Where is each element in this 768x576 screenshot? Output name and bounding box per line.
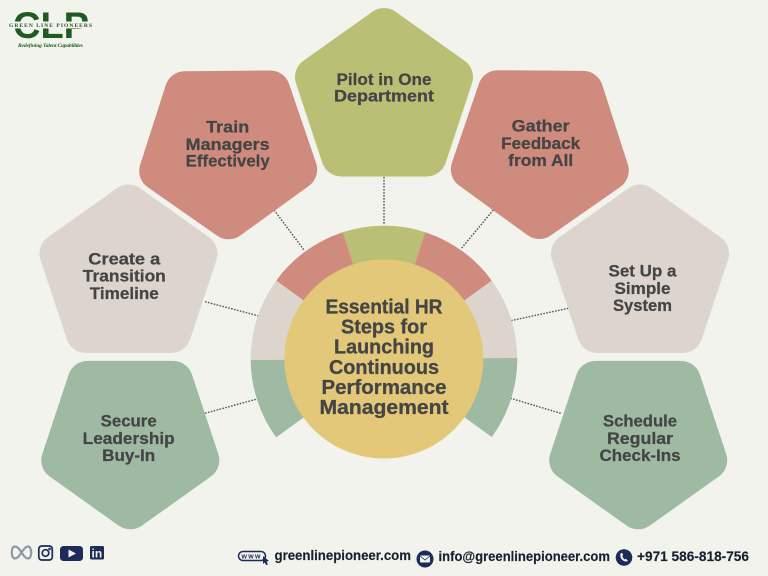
panel: Secure Leadership Buy-In: Secure — [101, 413, 157, 431]
icon: instagram — [39, 546, 52, 560]
panel: Train Managers Effectively: Train — [206, 119, 249, 137]
footer contacts — [238, 547, 749, 568]
center circle with title: Performance — [322, 376, 446, 399]
logo: Green Line Pioneers: Redefining Talent Capabilities — [17, 43, 83, 49]
panel: Schedule Regular Check-Ins: Schedule — [603, 413, 677, 431]
icon: www cursor: www — [240, 554, 261, 560]
panel: Set Up a Simple System — [571, 204, 709, 333]
panel: Gather Feedback from All: from All — [508, 152, 573, 170]
phone text: +971 586-818-756 — [637, 548, 749, 564]
panel: Secure Leadership Buy-In: Buy-In — [102, 447, 155, 465]
panel: Secure Leadership Buy-In — [61, 381, 199, 509]
center circle with title: Continuous — [329, 356, 439, 379]
panel: Create a Transition Timeline: Timeline — [90, 285, 159, 303]
panel: Schedule Regular Check-Ins: Check-Ins — [600, 447, 680, 465]
logo: Green Line Pioneers: GREEN LINE PIONEERS — [9, 23, 92, 29]
icon: youtube — [60, 546, 83, 561]
panel: Pilot in One Department — [315, 28, 453, 156]
icon: phone — [616, 549, 632, 566]
panel: Train Managers Effectively — [159, 90, 298, 220]
panel: Gather Feedback from All — [470, 90, 609, 220]
panel: Schedule Regular Check-Ins — [569, 381, 707, 509]
icon: linkedin: in — [92, 546, 102, 560]
logo: Green Line Pioneers: CLP — [13, 5, 89, 46]
center circle with title: Management — [320, 396, 449, 419]
panel: Schedule Regular Check-Ins: Regular — [607, 430, 674, 448]
icon: email — [416, 550, 434, 568]
email text: info@greenlinepioneer.com — [438, 548, 610, 564]
panel: Set Up a Simple System: Set Up a — [608, 263, 677, 281]
social icons — [12, 546, 104, 561]
website text: greenlinepioneer.com — [274, 547, 411, 563]
panel: Create a Transition Timeline: Create a — [88, 250, 161, 268]
panel: Set Up a Simple System: Simple — [614, 280, 670, 298]
panel: Set Up a Simple System: System — [613, 297, 672, 315]
center circle with title: Steps for — [341, 315, 427, 338]
center circle with title: Launching — [334, 335, 434, 358]
center circle with title — [284, 260, 483, 458]
panel: Train Managers Effectively: Effectively — [186, 153, 271, 171]
panel: Pilot in One Department: Department — [334, 88, 435, 106]
panel: Secure Leadership Buy-In: Leadership — [83, 430, 175, 448]
center circle with title: Essential HR — [326, 295, 443, 318]
panel: Pilot in One Department: Pilot in One — [336, 71, 432, 89]
panel: Train Managers Effectively: Managers — [186, 136, 270, 154]
panel: Create a Transition Timeline: Transition — [83, 268, 166, 286]
panel: Create a Transition Timeline — [60, 204, 198, 333]
panel: Gather Feedback from All: Feedback — [501, 135, 581, 153]
panel: Gather Feedback from All: Gather — [512, 118, 570, 136]
segmented ring — [251, 226, 517, 437]
icon: meta — [12, 546, 31, 558]
connector lines — [205, 177, 568, 413]
icon: www cursor — [238, 552, 269, 565]
